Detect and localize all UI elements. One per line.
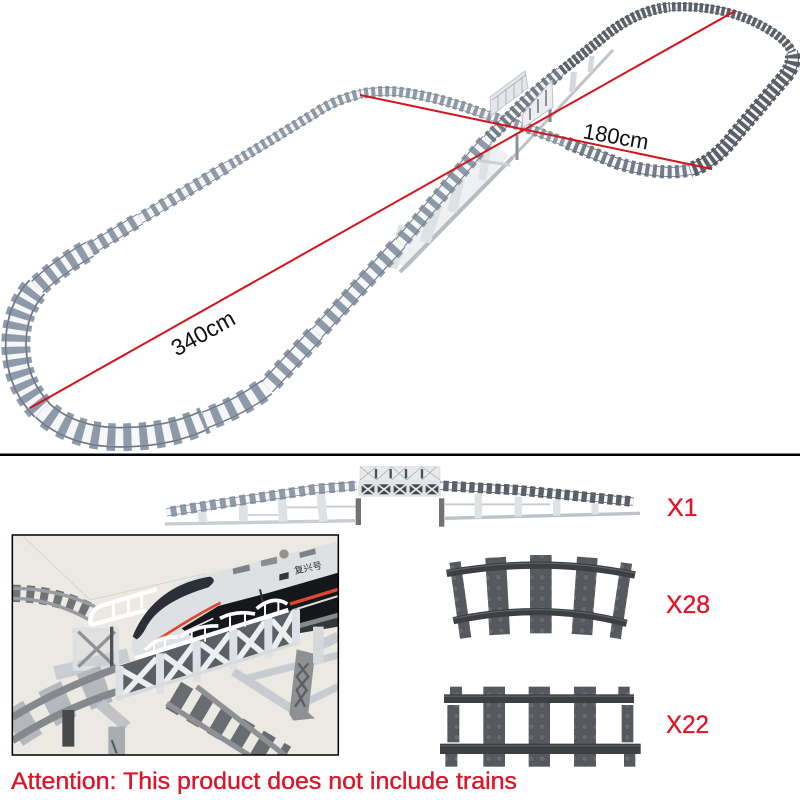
panel: photo of train on bridge [12, 535, 338, 760]
bridge supports: elevated viaduct [392, 50, 613, 272]
attention note: Attention: This product does not include trains [11, 768, 517, 795]
right base plates [233, 637, 338, 710]
straight rails [440, 694, 641, 754]
curved sleepers [449, 555, 632, 639]
track: right loop [360, 7, 793, 243]
far curved track [12, 588, 95, 619]
front bridge truss [117, 600, 297, 701]
bridge left ramp [165, 486, 358, 525]
bridge centre truss [358, 467, 441, 497]
label: X22: X22 [666, 711, 709, 739]
panel: straight track piece [440, 687, 641, 767]
panel: track layout diagram [16, 7, 793, 437]
label: 340cm: 340cm [167, 305, 239, 361]
back bridge [55, 589, 157, 673]
dimension line: 180cm [360, 95, 712, 169]
train name text: 复兴号 [293, 559, 323, 576]
divider line [0, 454, 800, 456]
track: left loop [16, 94, 400, 437]
bridge right ramp [440, 486, 640, 527]
photo floor [12, 535, 338, 755]
photo border [12, 535, 338, 755]
panel: curved track piece [447, 555, 635, 639]
straight sleepers [445, 687, 635, 767]
lower straight track [167, 687, 287, 760]
dimension line: 340cm [30, 11, 735, 408]
label: X28: X28 [666, 591, 710, 619]
panel: bridge piece [165, 467, 640, 527]
lower curved track [12, 668, 127, 755]
white gaps between curved rails [469, 573, 614, 615]
bridge trusses at crossing [490, 71, 553, 128]
label: X1: X1 [667, 494, 698, 522]
right lattice pier [289, 649, 315, 721]
curved rails [447, 563, 635, 623]
train [132, 542, 338, 663]
label: 180cm: 180cm [581, 118, 651, 155]
